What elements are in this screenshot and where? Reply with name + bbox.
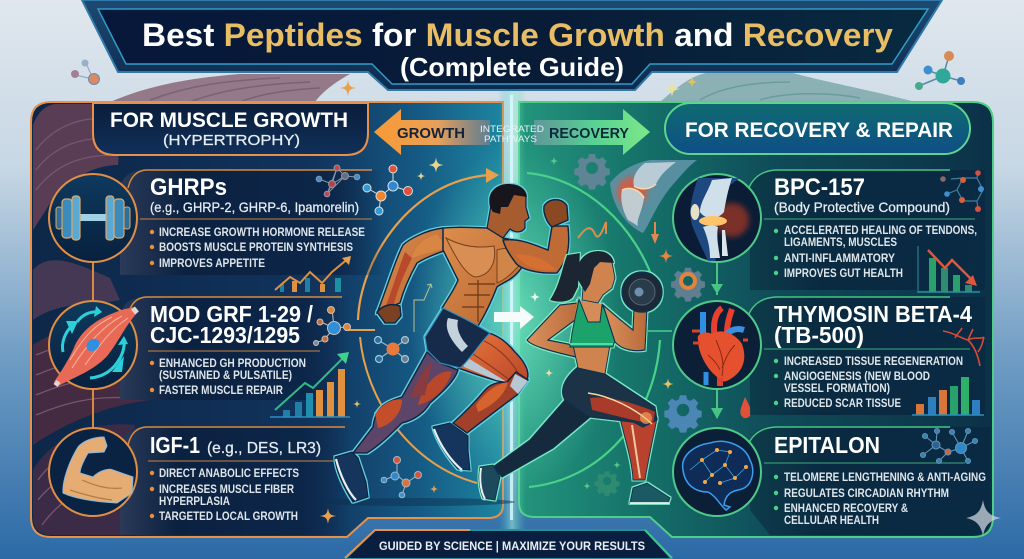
card title: BPC-157: BPC-157 [774, 174, 865, 201]
sparkles: right [530, 157, 674, 490]
female back leg [493, 390, 600, 477]
card subtitle: IGF-1: (e.g., DES, LR3) [207, 440, 321, 457]
heading text line 1: FOR MUSCLE GROWTH [110, 109, 348, 132]
icon: flexed arm [49, 428, 137, 516]
bullet list: GHRPs: INCREASE GROWTH HORMONE RELEASE [159, 225, 365, 239]
sparkles: center left upper [417, 157, 444, 180]
knee illustration: recovery [610, 160, 697, 233]
card title: Epitalon: EPITALON [774, 432, 880, 458]
bullet list: IGF-1 [150, 466, 299, 523]
female front arm [603, 305, 647, 351]
molecule: center left lower [381, 456, 422, 498]
molecule: top left decoration [71, 60, 100, 84]
male neck and face [487, 185, 529, 238]
molecule: GHRPs [316, 165, 360, 197]
panel: muscle growth background [31, 102, 503, 537]
card title: Mod GRF: CJC-1293/1295 [150, 322, 300, 348]
female abdomen [573, 345, 610, 374]
heading: for recovery and repair [665, 103, 970, 154]
bullet list: Mod GRF: ENHANCED GH PRODUCTION [159, 356, 306, 370]
gear: lower blue [664, 395, 702, 433]
chart: BPC-157 decline [918, 246, 980, 293]
muscle texture: top left band [110, 74, 350, 102]
male hair [489, 184, 527, 214]
panel: Thymosin card [673, 297, 985, 415]
icon: knee joint [673, 174, 761, 262]
male back shoe [335, 452, 368, 502]
female back arm [527, 303, 580, 358]
card title: IGF-1: IGF-1 [150, 432, 200, 458]
connector: left timeline [92, 262, 94, 428]
card title: Thymosin [774, 301, 972, 348]
decoration: thin gold lines behind runner [414, 284, 432, 332]
card title: GHRPs: GHRPs [150, 174, 227, 201]
bullet list: GHRPs: IMPROVES APPETITE [159, 256, 265, 270]
male back leg [353, 352, 458, 453]
muscle texture: top right band [660, 72, 915, 102]
center glow divider [498, 90, 526, 530]
bullet list: Mod GRF [150, 356, 306, 397]
chart: Thymosin bars [912, 377, 984, 415]
female leggings hip and thigh [563, 367, 657, 427]
bullet list: Epitalon: REGULATES CIRCADIAN RHYTHM [784, 486, 949, 500]
male fist [544, 200, 568, 227]
molecule: BPC-157 [940, 170, 984, 212]
molecule: Epitalon [920, 428, 978, 464]
title banner [82, 0, 942, 90]
male front calf [453, 372, 528, 433]
molecule: top right decoration [915, 51, 965, 90]
title line 1: Best Peptides for Muscle Growth and Recovery [142, 17, 893, 53]
bullet list: BPC-157: LIGAMENTS, MUSCLES [784, 235, 897, 249]
molecule: center left upper [363, 165, 412, 215]
connector: right timeline [711, 262, 723, 419]
card title: Thymosin: THYMOSIN BETA-4 [774, 301, 972, 327]
muscle texture: left panel edge [33, 104, 150, 535]
gear: lower green [595, 471, 619, 496]
female hair [577, 251, 614, 292]
male front shoe [433, 423, 470, 470]
gear: top [574, 154, 610, 190]
heading text line 2: (HYPERTROPHY) [163, 132, 300, 149]
bullet list: BPC-157: ACCELERATED HEALING OF TENDONS, [784, 223, 977, 237]
icon: blood drop [740, 397, 751, 418]
bullet list: GHRPs: BOOSTS MUSCLE PROTEIN SYNTHESIS [159, 240, 353, 254]
ground shadow [315, 498, 515, 506]
bullet list: Thymosin: VESSEL FORMATION) [784, 381, 890, 395]
panel: Epitalon card [673, 427, 990, 535]
bullet list: BPC-157: ANTI-INFLAMMATORY [784, 251, 895, 265]
bullet list: IGF-1: INCREASES MUSCLE FIBER [159, 482, 294, 496]
bullet list: GHRPs [150, 225, 365, 270]
card title: Mod GRF [150, 301, 314, 348]
icon: brain [673, 428, 761, 516]
bullet list: IGF-1: TARGETED LOCAL GROWTH [159, 509, 298, 523]
squiggle and drop accents [578, 222, 659, 244]
bullet list: IGF-1: HYPERPLASIA [159, 494, 230, 508]
panel: recovery background [519, 102, 993, 537]
bullet list: Thymosin: INCREASED TISSUE REGENERATION [784, 354, 963, 368]
bullet list: Epitalon: ENHANCED RECOVERY & [784, 501, 908, 515]
panel: GHRPs card [49, 170, 385, 292]
center light line [510, 95, 513, 520]
male hand [377, 305, 401, 323]
male shorts [425, 308, 490, 368]
female front shin [620, 418, 657, 480]
watermark sparkle [966, 500, 1001, 536]
arc: green recovery arc [527, 173, 672, 487]
icon: muscle fiber [49, 301, 137, 389]
footer banner [345, 530, 672, 559]
card subtitle: GHRPs: (e.g., GHRP-2, GHRP-6, Ipamorelin) [150, 199, 359, 215]
female upper chest [572, 300, 617, 333]
panel: Mod GRF card [49, 297, 350, 417]
bullet list: Thymosin: REDUCED SCAR TISSUE [784, 396, 901, 410]
arrow label: growth: GROWTH [397, 125, 465, 142]
chart: Mod GRF growth [270, 352, 350, 417]
male back arm [377, 228, 447, 313]
arrow: recovery [534, 109, 650, 155]
bullet list: Mod GRF: FASTER MUSCLE REPAIR [159, 383, 283, 397]
icon: blood vessels [943, 328, 984, 366]
sparkles: left lower [320, 400, 438, 524]
bullet list: Epitalon: CELLULAR HEALTH [784, 513, 879, 527]
male torso [442, 227, 533, 326]
icon: dumbbell [49, 174, 137, 262]
panel: BPC-157 card [673, 170, 985, 293]
male front thigh [458, 332, 528, 395]
figure: male runner [335, 184, 569, 502]
card title: Mod GRF: MOD GRF 1-29 / [150, 301, 314, 327]
heading: for muscle growth [93, 103, 368, 155]
bullet list: IGF-1: DIRECT ANABOLIC EFFECTS [159, 466, 299, 480]
heading text: FOR RECOVERY & REPAIR [685, 119, 953, 142]
female front shoe [630, 483, 670, 503]
molecule: Mod GRF [314, 306, 350, 346]
chart: GHRPs growth [275, 256, 351, 292]
icon: heart [673, 301, 761, 389]
card subtitle: BPC-157: (Body Protective Compound) [774, 199, 950, 215]
center glow [410, 145, 620, 495]
panel: IGF-1 card [49, 427, 350, 535]
female ponytail [550, 253, 580, 302]
card title: Thymosin: (TB-500) [774, 322, 864, 348]
bullet list: Thymosin: ANGIOGENESIS (NEW BLOOD [784, 369, 930, 383]
sparkle: top [340, 76, 698, 97]
figure: female athlete [479, 251, 670, 503]
arc: orange growth arc [345, 168, 499, 483]
female neck and face [580, 254, 615, 303]
female sports top [570, 299, 617, 347]
gear: middle orange [671, 268, 705, 302]
arrow: growth [374, 109, 490, 155]
female back shoe [479, 465, 500, 500]
center label: integrated pathways: PATHWAYS [484, 134, 537, 145]
female dumbbell [622, 272, 662, 312]
male raised arm [503, 226, 569, 273]
footer text: GUIDED BY SCIENCE | MAXIMIZE YOUR RESULTS [379, 541, 645, 553]
center label: integrated pathways: INTEGRATED [480, 124, 544, 135]
center label: integrated pathways [480, 124, 544, 145]
bullet list: BPC-157: IMPROVES GUT HEALTH [784, 266, 903, 280]
bullet list: Thymosin [774, 354, 963, 410]
arrow label: recovery: RECOVERY [549, 125, 629, 142]
molecule: center left middle [374, 336, 408, 362]
bullet list: Epitalon: TELOMERE LENGTHENING & ANTI-AGING [784, 470, 986, 484]
arrow: center white [494, 306, 534, 329]
bullet list: Epitalon [774, 470, 986, 527]
bullet list: BPC-157 [774, 223, 977, 280]
bullet list: Mod GRF: (SUSTAINED & PULSATILE) [159, 368, 292, 382]
title line 2: (Complete Guide) [400, 52, 624, 82]
